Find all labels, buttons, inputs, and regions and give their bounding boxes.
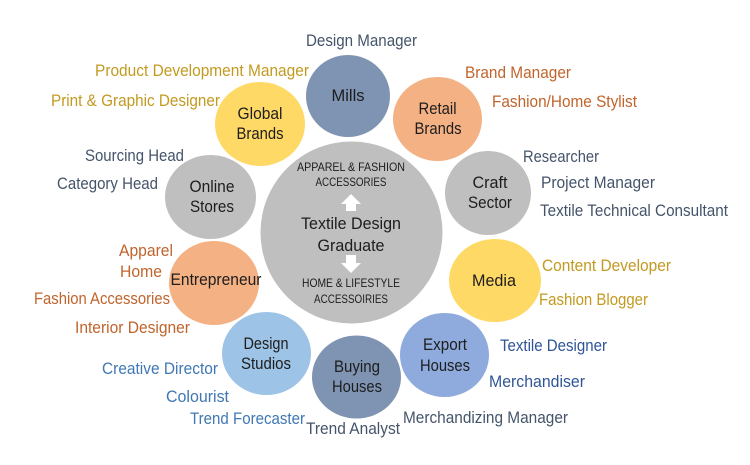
labels: Craft Sector (523, 148, 728, 220)
labels: Mills: Design Manager (306, 32, 417, 50)
circle: Craft Sector (445, 151, 531, 235)
circle: Mills: Mills (332, 87, 364, 105)
circle: Export Houses: Houses (420, 357, 470, 375)
labels: Media: Content Developer (542, 257, 671, 275)
circle: Mills (306, 55, 390, 137)
circle: Buying Houses: Houses (332, 378, 382, 396)
circle: Export Houses (400, 313, 489, 397)
labels: Design Studios: Colourist (166, 388, 229, 406)
labels: Design Studios: Creative Director (102, 360, 218, 378)
labels: Entrepreneur (34, 242, 190, 337)
labels: Buying Houses: Trend Analyst (306, 420, 400, 438)
labels: Craft Sector: Researcher (523, 148, 599, 166)
circle: centre (260, 142, 442, 324)
labels: Retail Brands: Brand Manager (465, 64, 571, 82)
labels: Export Houses: Merchandiser (489, 373, 585, 391)
labels: Retail Brands (465, 64, 637, 111)
circle: Media: Media (472, 272, 517, 290)
circle: Entrepreneur: Entrepreneur (170, 271, 262, 289)
labels: Retail Brands: Fashion/Home Stylist (492, 93, 637, 111)
circle: Online Stores: Stores (190, 198, 234, 216)
labels: Global Brands: Product Development Manager (95, 62, 309, 80)
centre top label: APPAREL & FASHION (297, 160, 405, 174)
circle: Design Studios: Studios (241, 355, 291, 373)
circle: centre: Graduate (318, 237, 384, 255)
circle: Entrepreneur (169, 241, 262, 325)
circle: Buying Houses (312, 336, 401, 418)
labels: Design Studios (102, 360, 305, 428)
circle: centre: ACCESSORIES (316, 175, 386, 189)
labels: Media (539, 257, 671, 309)
labels: Export Houses: Textile Designer (500, 337, 607, 355)
labels: Craft Sector: Project Manager (541, 174, 655, 192)
circle: Design Studios: Design (244, 335, 288, 353)
circle: Export Houses: Export (423, 336, 467, 354)
circle: Media (449, 239, 541, 322)
circle: Online Stores: Online (190, 178, 234, 196)
labels: Online Stores: Sourcing Head (85, 147, 184, 165)
circle: Design Studios (222, 312, 311, 395)
circle: Global Brands: Global (238, 105, 282, 123)
arrow: down (341, 255, 361, 273)
labels: Entrepreneur: Interior Designer (75, 319, 190, 337)
labels: Entrepreneur: Apparel (119, 242, 173, 260)
centre bottom label: HOME & LIFESTYLE (302, 276, 400, 290)
circle: Retail Brands (393, 77, 482, 161)
labels: Export Houses (403, 337, 607, 427)
labels: Global Brands: Print & Graphic Designer (51, 92, 220, 110)
labels: Entrepreneur: Home (120, 263, 162, 281)
centre title: Textile Design (301, 215, 401, 233)
circle: Retail Brands: Brands (414, 120, 462, 138)
circle: Retail Brands: Retail (418, 100, 456, 118)
labels: Online Stores: Category Head (57, 175, 158, 193)
labels: Export Houses: Merchandizing Manager (403, 409, 568, 427)
labels: Online Stores (57, 147, 184, 193)
labels: Entrepreneur: Fashion Accessories (34, 290, 170, 308)
circle: Global Brands: Brands (236, 125, 284, 143)
circle: Craft Sector: Sector (468, 194, 512, 212)
circle: Craft Sector: Craft (472, 174, 508, 192)
circle: centre: ACCESSOIRIES (314, 292, 388, 306)
circle: Buying Houses: Buying (334, 358, 380, 376)
circle: Online Stores (165, 155, 256, 239)
labels: Global Brands (51, 62, 309, 110)
arrow: up (341, 194, 361, 211)
circle: Global Brands (215, 82, 305, 166)
labels: Craft Sector: Textile Technical Consultant (540, 202, 728, 220)
labels: Design Studios: Trend Forecaster (190, 410, 305, 428)
labels: Media: Fashion Blogger (539, 291, 648, 309)
